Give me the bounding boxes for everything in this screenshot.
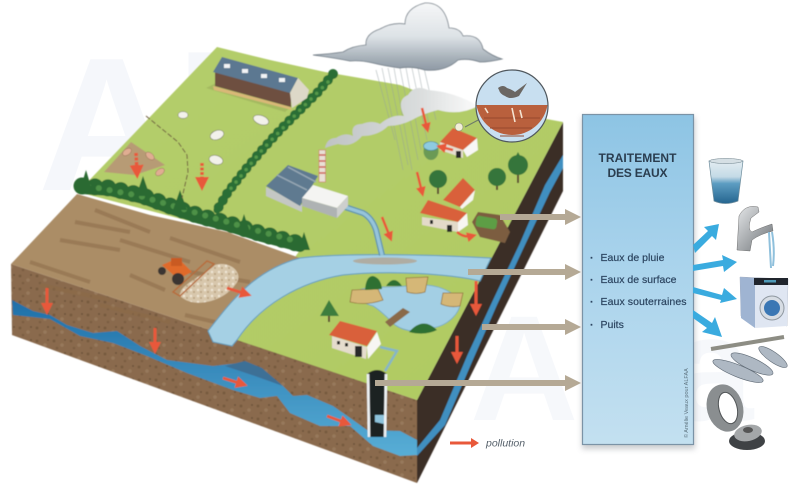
- pigs: [121, 147, 166, 177]
- rain: [376, 68, 436, 170]
- panel list: Eaux de surface: [600, 274, 677, 286]
- hedge: pasture divider: [217, 74, 333, 210]
- panel list: Puits: [600, 319, 624, 331]
- river silt: [353, 258, 417, 264]
- well: [367, 370, 387, 437]
- icon: bearings: [701, 380, 765, 450]
- farmhouse with rain tank: [424, 128, 478, 160]
- cloud: [313, 3, 502, 70]
- chimney smoke: [325, 88, 478, 148]
- blue output arrows: [693, 224, 737, 337]
- factory chimney: [319, 150, 326, 182]
- watermark: Al: [38, 19, 228, 231]
- panel: traitement des eaux: DES EAUX: [608, 166, 668, 180]
- brown arrows to treatment: [375, 209, 581, 391]
- river: [208, 255, 491, 346]
- right aquifer stripe: [417, 155, 563, 456]
- stream from factory: [345, 207, 382, 255]
- credit: © Amélie Veaux pour ALFAA: [683, 368, 690, 438]
- factory: [266, 150, 348, 218]
- rain tank: [424, 142, 438, 160]
- icon: tap: [737, 206, 774, 268]
- icon: glass of water: [709, 158, 743, 204]
- panel list: Eaux de pluie: [600, 252, 665, 264]
- barn: [206, 57, 309, 112]
- pollution legend: pollution: [485, 438, 525, 450]
- tree by pond house: [320, 300, 339, 322]
- pond: [355, 285, 460, 331]
- septic pit: [472, 212, 510, 243]
- panel list: ·: [590, 296, 594, 308]
- pollution legend: [450, 438, 525, 450]
- wooden jetty: [385, 308, 410, 327]
- panel: traitement des eaux: [582, 114, 695, 449]
- pond bushes: [365, 276, 437, 334]
- panel list: ·: [590, 274, 594, 286]
- panel list: [590, 252, 686, 331]
- furrows: [30, 210, 250, 322]
- groundwater aquifer: [12, 300, 417, 456]
- pig pen patch: [104, 142, 165, 175]
- panel list: ·: [590, 319, 594, 331]
- block diagram: landscape cross-section: [11, 3, 563, 483]
- tractor: [158, 258, 238, 303]
- fence: [146, 116, 188, 198]
- cave air pocket: [225, 361, 283, 386]
- farm buildings and septic tank: [420, 178, 510, 243]
- green land surface: [78, 47, 563, 400]
- icon: fish on rail: [711, 337, 790, 387]
- watermark: Alfa: [470, 284, 755, 452]
- trees: [429, 152, 528, 194]
- house near pond: [329, 321, 381, 359]
- dust cloud: [180, 264, 238, 303]
- hedge: field boundary: [80, 170, 310, 250]
- panel list: Eaux souterraines: [600, 296, 686, 308]
- reeds: [350, 277, 463, 307]
- pollution arrows: [47, 108, 476, 423]
- panel list: ·: [590, 252, 594, 264]
- ploughed field: [11, 194, 300, 330]
- right dark soil face: [417, 122, 563, 483]
- pipe house to well: [380, 347, 397, 371]
- magnifier: bird on clay soil: [455, 70, 548, 142]
- front soil face: [11, 264, 417, 483]
- bird: [498, 83, 527, 98]
- panel heading: TRAITEMENT: [598, 151, 677, 165]
- pasture animals: [178, 112, 270, 166]
- icon: washing machine: [740, 277, 788, 328]
